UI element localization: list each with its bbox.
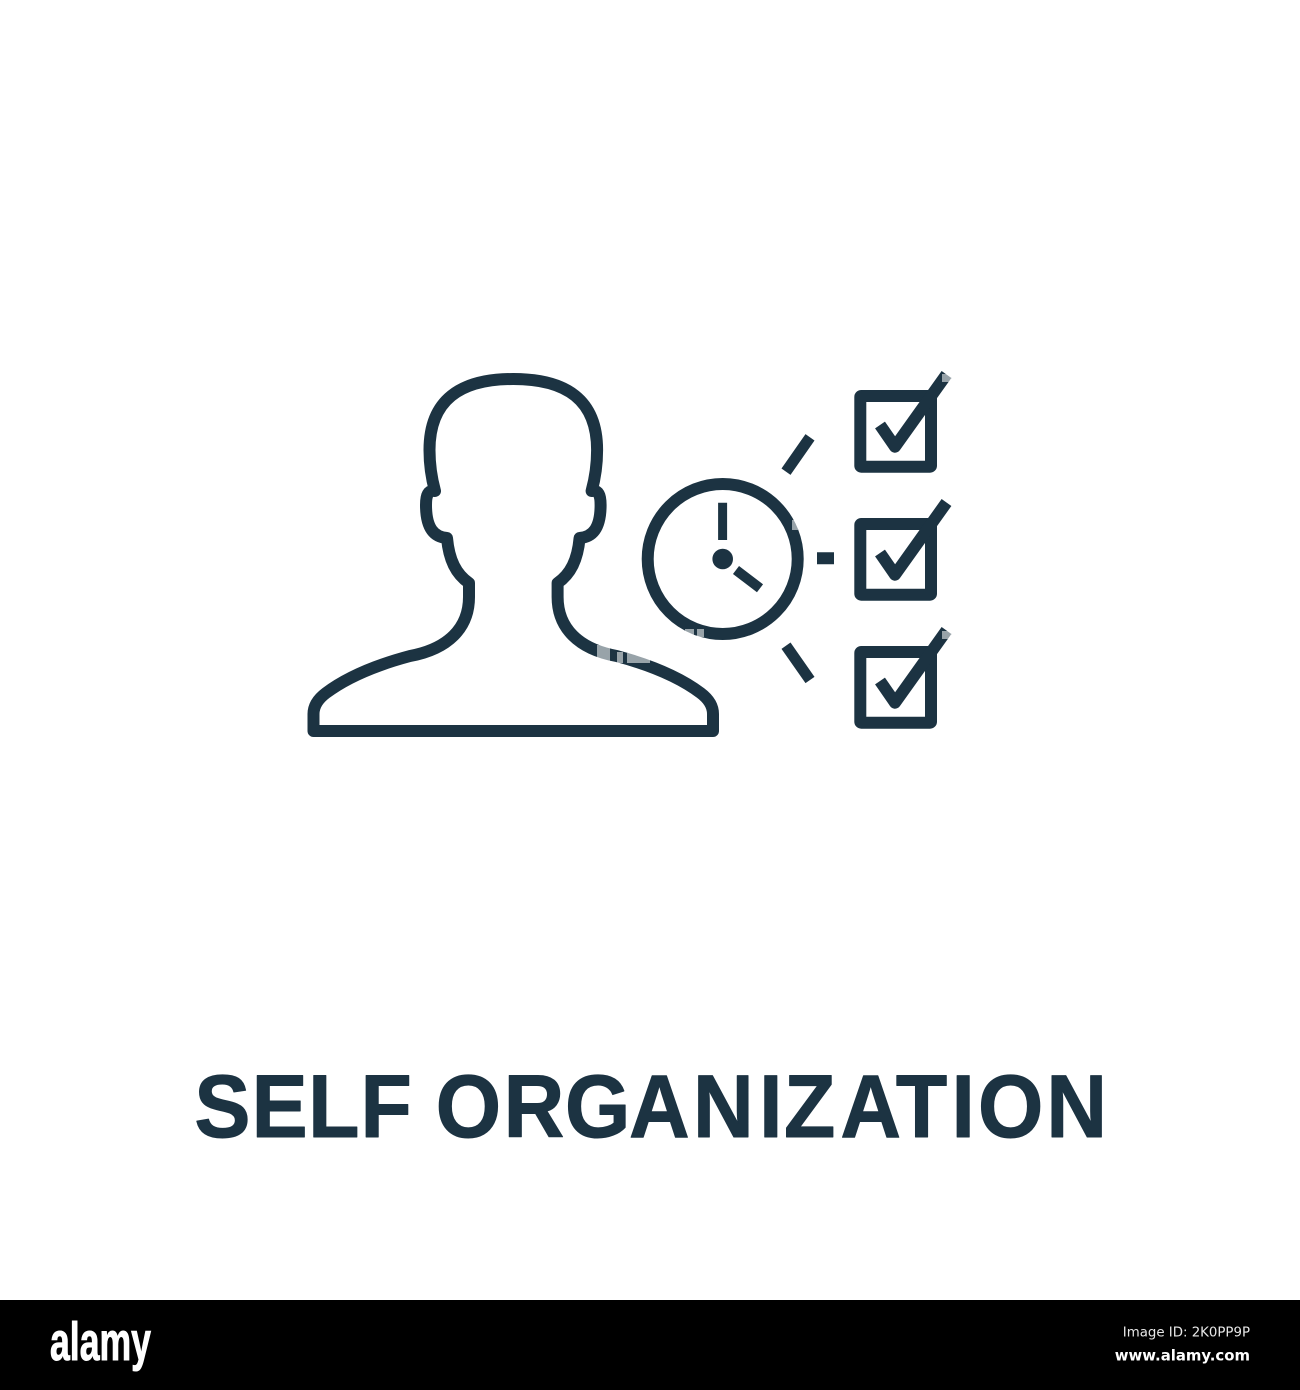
checkbox 3 (860, 630, 946, 723)
footer bar (0, 1300, 1300, 1390)
icon: clock (648, 484, 798, 634)
icon: checklist (860, 374, 946, 723)
checkbox 2 (860, 502, 946, 595)
title: SELF ORGANIZATION (194, 1056, 1107, 1156)
icon: person silhouette (314, 379, 713, 731)
icon: connector dashes (786, 437, 834, 680)
image id: Image ID: 2K0PP9P (1123, 1326, 1250, 1341)
footer logo: alamy (50, 1312, 151, 1372)
website: www.alamy.com (1115, 1347, 1250, 1365)
watermark fragments (597, 374, 951, 663)
checkbox 1 (860, 374, 946, 467)
